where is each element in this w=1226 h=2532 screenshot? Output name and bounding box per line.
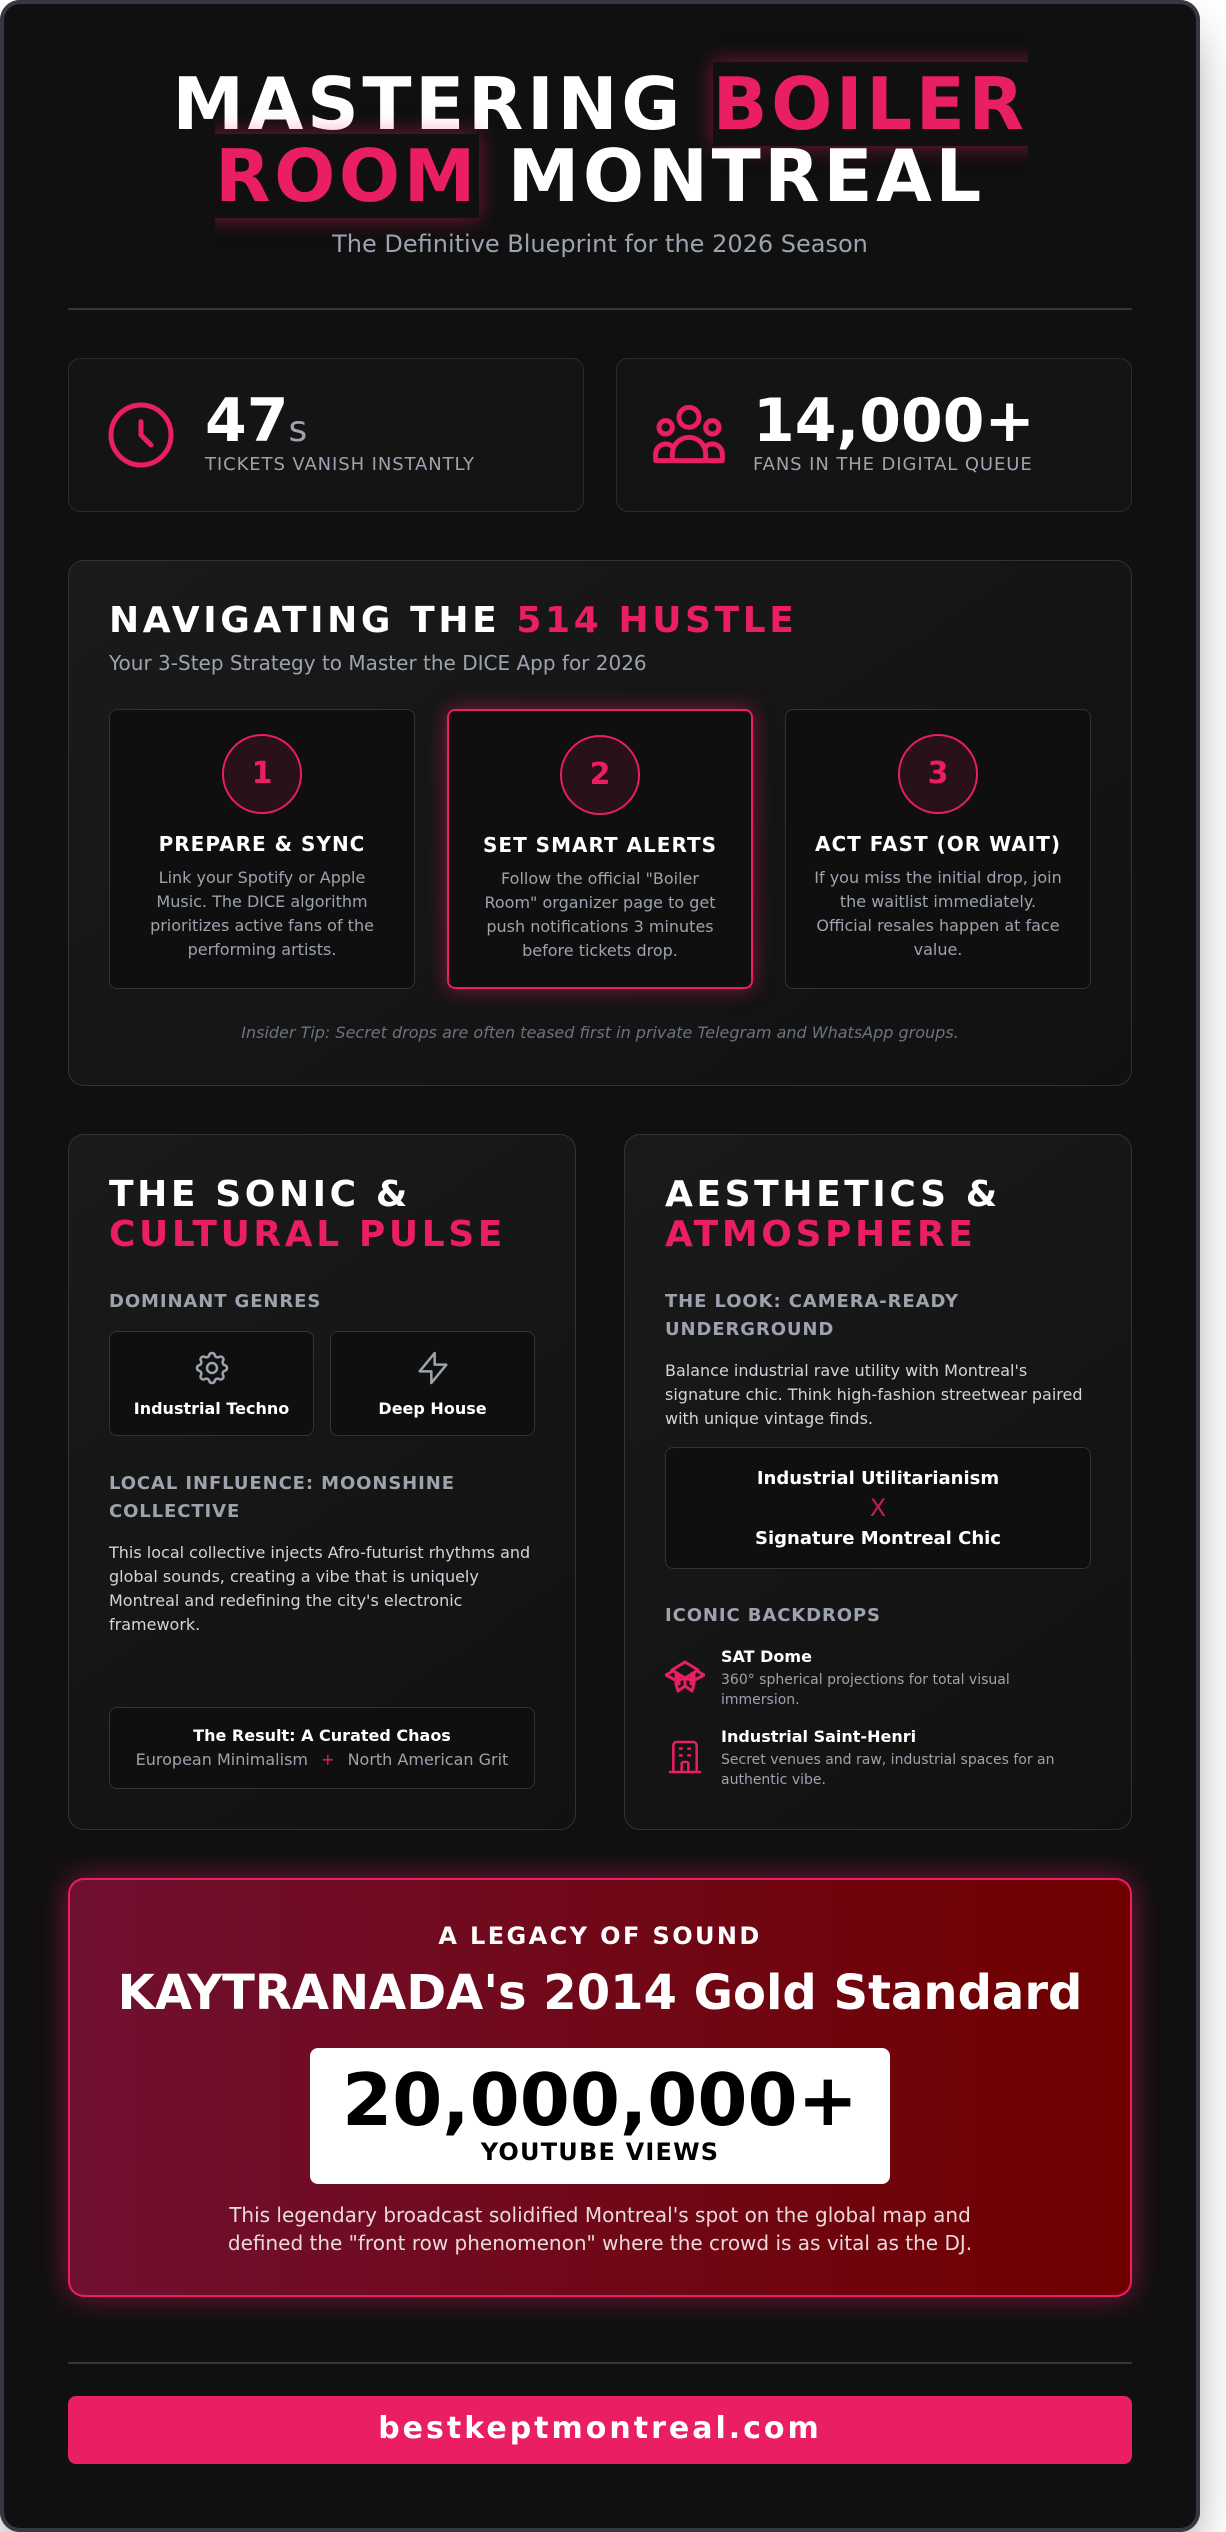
heading [109,1174,506,1255]
icon: building [668,1740,702,1774]
result callout [109,1707,535,1789]
genre label: Deep House [378,1399,487,1418]
local influence text: This local collective injects Afro-futurist rhythms and [109,1543,530,1562]
subheading: local influence: LOCAL INFLUENCE: MOONSHINE [109,1473,455,1494]
step description: If you miss the initial drop, join [814,868,1062,887]
step description: Follow the official "Boiler [501,869,699,888]
step number 1: 1 [252,756,272,791]
heading: NAVIGATING THE 514 HUSTLE [109,600,797,641]
subheading: dominant genres: DOMINANT GENRES [109,1291,321,1312]
footer url: bestkeptmontreal.com [378,2411,822,2446]
style one: Industrial Utilitarianism [757,1468,999,1489]
heading: ATMOSPHERE [665,1214,976,1255]
panel: tickets stat [68,358,584,512]
step description: before tickets drop. [522,941,678,960]
cross: X [870,1494,886,1522]
views callout [310,2048,890,2184]
subheading: iconic backdrops: ICONIC BACKDROPS [665,1605,881,1626]
the look text: signature chic. Think high-fashion streetwear paired [665,1385,1083,1404]
legacy heading: KAYTRANADA's 2014 Gold Standard [118,1965,1082,2021]
the look text: Balance industrial rave utility with Montreal's [665,1361,1027,1380]
step description: performing artists. [188,940,336,959]
icon: academic cap [665,1660,705,1693]
step number 3 [898,734,978,814]
backdrop: SAT Dome: SAT Dome [721,1647,812,1666]
genre: industrial techno [109,1331,314,1436]
stat label: fans: FANS IN THE DIGITAL QUEUE [753,454,1033,475]
stat: 47 seconds: 47s [205,386,307,456]
step number 3: 3 [928,756,948,791]
legacy description: defined the "front row phenomenon" where the crowd is as vital as the DJ. [228,2231,972,2255]
subtitle: The Definitive Blueprint for the 2026 Season [332,230,868,258]
step description: the waitlist immediately. [840,892,1036,911]
panel: legacy of sound [68,1878,1132,2297]
step title: ACT FAST (OR WAIT) [815,832,1061,856]
step number 1 [222,734,302,814]
step 2 card (highlighted) [447,709,753,989]
backdrop description: Secret venues and raw, industrial spaces for an [721,1752,1055,1768]
subheading: the look: THE LOOK: CAMERA-READY [665,1291,959,1312]
local influence text: framework. [109,1615,200,1634]
step 1 card [109,709,415,989]
stat label: tickets: TICKETS VANISH INSTANTLY [205,454,475,475]
legacy description [228,2203,972,2255]
step description: Official resales happen at face [816,916,1060,935]
panel: fans stat [616,358,1132,512]
style formula callout [665,1447,1091,1569]
views number: 20,000,000+ [342,2058,858,2142]
heading: CULTURAL PULSE [109,1214,506,1255]
result formula: European Minimalism + North American Grit [136,1750,508,1769]
step description: prioritizes active fans of the [150,916,374,935]
subheading: the look [665,1291,959,1340]
panel: sonic and cultural pulse [68,1134,576,1830]
subheading: the look: UNDERGROUND [665,1319,834,1340]
subheading: local influence [109,1473,455,1522]
backdrop description [721,1752,1055,1788]
subheading: local influence: COLLECTIVE [109,1501,240,1522]
title: MASTERING BOILER ROOM MONTREAL [172,62,1028,218]
heading: AESTHETICS & [665,1174,1001,1215]
step description: Room" organizer page to get [484,893,716,912]
step title: PREPARE & SYNC [159,832,365,856]
step number 2: 2 [590,757,610,792]
icon: gear [196,1352,228,1384]
local influence text: global sounds, creating a vibe that is uniquely [109,1567,479,1586]
result title: The Result: A Curated Chaos [193,1726,451,1745]
panel: navigating the 514 hustle [68,560,1132,1086]
subheading: Your 3-Step Strategy to Master the DICE App for 2026 [109,651,647,675]
step description: value. [914,940,962,959]
kicker: A LEGACY OF SOUND [438,1922,762,1950]
step number 2 [560,735,640,815]
icon: user group [653,404,725,464]
step description [150,868,374,959]
the look text [665,1361,1083,1428]
footer bar [68,2396,1132,2464]
backdrop: Industrial Saint-Henri: Industrial Saint-Henri [721,1727,916,1746]
insider tip: Insider Tip: Secret drops are often teased first in private Telegram and WhatsApp groups. [241,1023,959,1042]
icon: lightning bolt [418,1352,448,1384]
step description [484,869,716,960]
stat: 14,000+: 14,000+ [753,386,1035,456]
backdrop description: immersion. [721,1692,800,1708]
step 3 card [785,709,1091,989]
step description: Link your Spotify or Apple [159,868,365,887]
heading [665,1174,1001,1255]
step description: Music. The DICE algorithm [156,892,368,911]
step description: push notifications 3 minutes [486,917,714,936]
heading: THE SONIC & [109,1174,411,1215]
local influence text [108,1543,530,1634]
panel: aesthetics and atmosphere [624,1134,1132,1830]
the look text: with unique vintage finds. [665,1409,873,1428]
local influence text: Montreal and redefining the city's electronic [109,1591,462,1610]
backdrop description: authentic vibe. [721,1772,826,1788]
style two: Signature Montreal Chic [755,1528,1001,1549]
step description [814,868,1062,959]
legacy description: This legendary broadcast solidified Montreal's spot on the global map and [229,2203,971,2227]
backdrop description: 360° spherical projections for total visual [721,1672,1010,1688]
step title: SET SMART ALERTS [483,833,717,857]
icon: clock [108,402,174,468]
backdrop description [721,1672,1010,1708]
genre label: Industrial Techno [134,1399,289,1418]
views label: YOUTUBE VIEWS [481,2138,719,2166]
genre: deep house [330,1331,535,1436]
